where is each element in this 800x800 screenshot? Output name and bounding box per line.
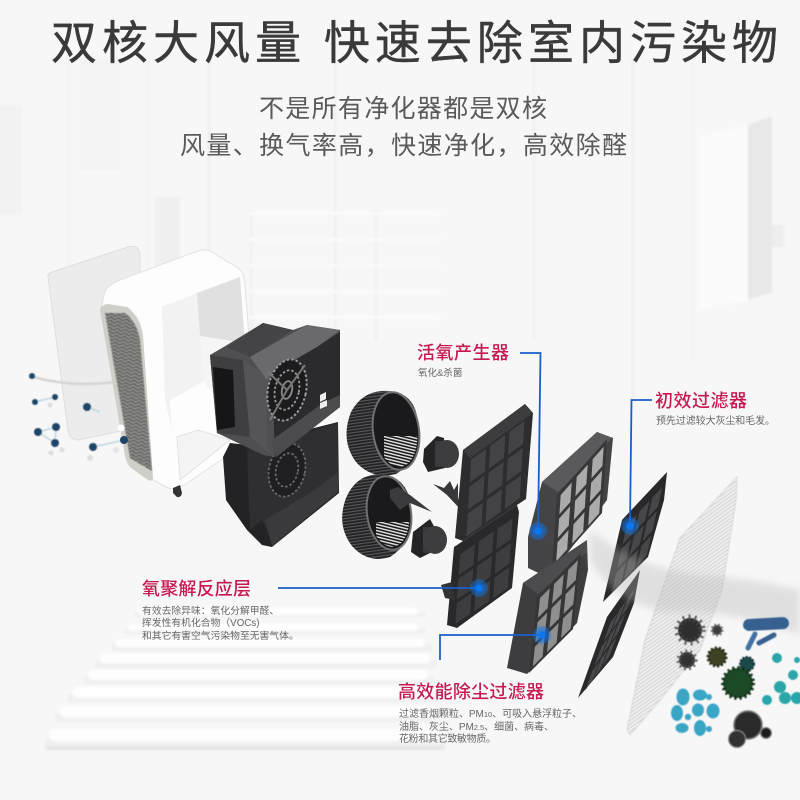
callout: oxygen decomposition layer: 挥发性有机化合物（VOCs): [142, 616, 260, 629]
callout: pre-filter: 初效过滤器: [655, 391, 747, 411]
HEPA filter lower: [507, 540, 588, 674]
callout: pre-filter: 预先过滤较大灰尘和毛发。: [656, 414, 775, 427]
blower wheel bottom: [342, 473, 432, 559]
subtitle line 2: 风量、换气率高，快速净化，高效除醛: [180, 132, 627, 160]
callout: high-efficiency dust filter: 花粉和其它致敏物质。: [399, 732, 496, 745]
callout: oxygen decomposition layer: 有效去除异味：氧化分解甲醛、: [142, 604, 279, 617]
blower wheel top: [347, 389, 424, 476]
upper fan housing: [210, 323, 340, 457]
HEPA filter upper: [528, 432, 613, 578]
pollutant germs: [671, 617, 800, 748]
callout: high-efficiency dust filter: 过滤香烟颗粒、PM10、可吸入悬浮粒子、: [399, 707, 582, 720]
callout: oxygen decomposition layer: 和其它有害空气污染物至无害气体。: [142, 629, 299, 642]
callout: high-efficiency dust filter: 油脂、灰尘、PM2.5、细菌、病毒、: [399, 720, 554, 733]
pre-filter lower: [578, 570, 640, 698]
molecule over grille: [120, 436, 128, 444]
filter panel: active oxygen upper: [455, 404, 533, 541]
floor light stripes: [45, 608, 446, 750]
filter panel: oxygen decomposition lower: [441, 505, 519, 628]
callout: pre-filter: [621, 391, 775, 535]
air inlet grille: [100, 304, 153, 481]
pre-filter upper: [603, 472, 667, 602]
molecules: [29, 373, 124, 461]
air swoosh over panel: [590, 530, 800, 635]
air stream behind purifier: [30, 368, 175, 384]
callout: active oxygen generator: 氧化&杀菌: [418, 367, 462, 379]
title: 双核大风量 快速去除室内污染物: [51, 17, 778, 69]
lower fan housing: [223, 422, 339, 547]
mesh front panel: [627, 477, 737, 735]
purifier back panel: [48, 246, 150, 440]
callout: active oxygen generator: 活氧产生器: [417, 343, 509, 363]
callout: oxygen decomposition layer: 氧聚解反应层: [142, 578, 251, 599]
callout: high-efficiency dust filter: 高效能除尘过滤器: [398, 682, 544, 702]
motors: [411, 436, 461, 558]
callout: high-efficiency dust filter: [398, 626, 582, 745]
subtitle line 1: 不是所有净化器都是双核: [259, 95, 547, 123]
callout: oxygen decomposition layer: [142, 578, 488, 642]
purifier body: [100, 250, 250, 497]
callout: active oxygen generator: [417, 343, 547, 540]
